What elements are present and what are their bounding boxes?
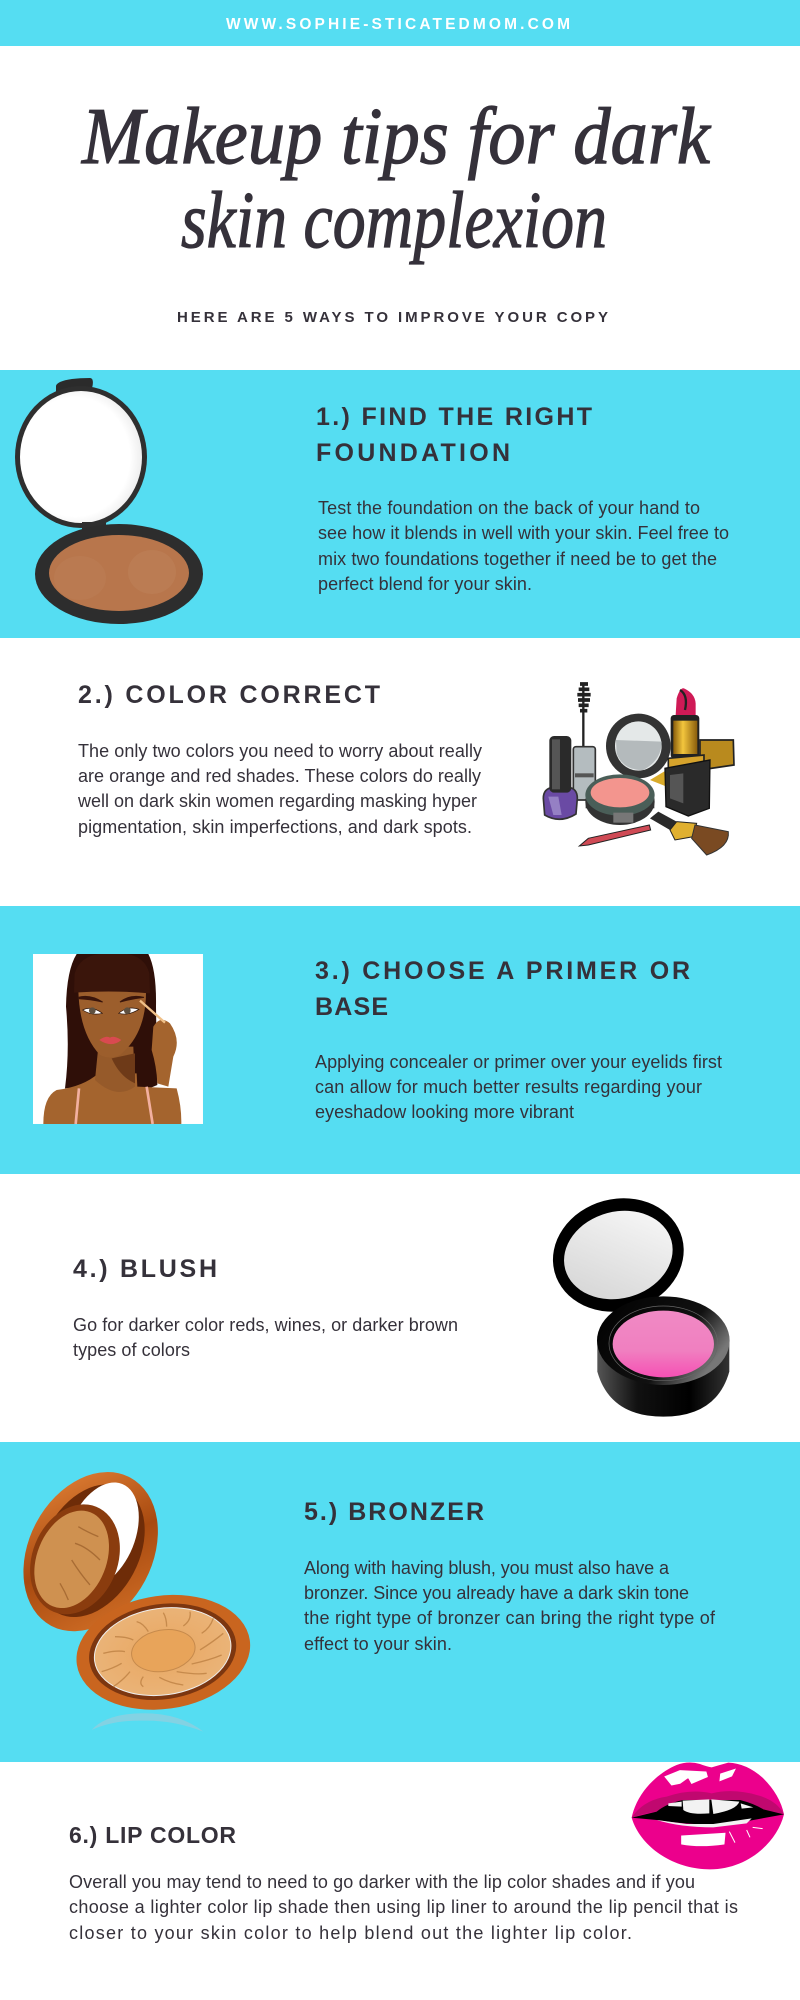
mouth bbox=[632, 1800, 784, 1824]
heading: 5.) BRONZER bbox=[304, 1498, 484, 1526]
body text: bronzer. Since you already have a dark skin tone bbox=[304, 1583, 689, 1603]
icon: foundation compact bbox=[15, 378, 203, 624]
heading: 2.) COLOR CORRECT bbox=[78, 681, 380, 709]
body text: the right type of bronzer can bring the right type of bbox=[304, 1608, 716, 1628]
website url: WWW.SOPHIE-STICATEDMOM.COM bbox=[226, 16, 570, 33]
icon: blush compact bbox=[540, 1184, 730, 1417]
heading bbox=[316, 403, 592, 467]
heading bbox=[315, 957, 690, 1021]
eyes bbox=[83, 1008, 139, 1014]
body text: see how it blends in well with your skin. Feel free to bbox=[318, 523, 729, 543]
body text: types of colors bbox=[73, 1340, 190, 1360]
body text: Along with having blush, you must also have a bbox=[304, 1558, 670, 1578]
highlights bbox=[665, 1769, 763, 1846]
subtitle: HERE ARE 5 WAYS TO IMPROVE YOUR COPY bbox=[177, 309, 608, 326]
body text bbox=[315, 1052, 722, 1122]
applicator bbox=[140, 1001, 165, 1023]
heading: 6.) LIP COLOR bbox=[69, 1822, 236, 1848]
nail polish bbox=[543, 736, 577, 819]
panel: tip 3 primer bbox=[0, 906, 800, 1174]
body text: Test the foundation on the back of your hand to bbox=[318, 498, 700, 518]
heading: 1.) FIND THE RIGHT bbox=[316, 403, 592, 431]
icon: makeup collection bbox=[543, 683, 734, 855]
body text bbox=[73, 1315, 458, 1360]
heading: FOUNDATION bbox=[316, 439, 510, 467]
title: Makeup tips for dark bbox=[81, 93, 711, 181]
straps bbox=[76, 1087, 153, 1124]
face bbox=[78, 990, 146, 1057]
icon: bronzer compact bbox=[0, 1449, 258, 1732]
body text: Applying concealer or primer over your eyelids first bbox=[315, 1052, 722, 1072]
title bbox=[81, 93, 711, 265]
pencil bbox=[579, 825, 651, 846]
lid bbox=[0, 1449, 185, 1655]
body text: pigmentation, skin imperfections, and dark spots. bbox=[78, 817, 472, 837]
shoulders bbox=[43, 1073, 181, 1124]
body text: can allow for much better results regarding your bbox=[315, 1077, 702, 1097]
teeth bbox=[668, 1799, 753, 1814]
heading: 3.) CHOOSE A PRIMER OR bbox=[315, 957, 690, 985]
panel: tip 5 bronzer bbox=[0, 1442, 800, 1762]
panel: tip 6 lip color bbox=[69, 1763, 784, 1943]
icon: pink lips bbox=[632, 1763, 784, 1869]
hair bbox=[65, 954, 157, 1100]
sun pattern in mirror bbox=[60, 1527, 100, 1600]
body text bbox=[304, 1558, 716, 1654]
heading: 4.) BLUSH bbox=[73, 1255, 217, 1283]
blush compact bbox=[585, 774, 655, 825]
body text: closer to your skin color to help blend out the lighter lip color. bbox=[69, 1923, 632, 1943]
top banner bbox=[0, 0, 800, 46]
body text: well on dark skin women regarding masking hyper bbox=[77, 791, 477, 811]
brush bbox=[650, 812, 728, 855]
reflection bbox=[92, 1713, 203, 1732]
neck bbox=[95, 1047, 135, 1092]
body text bbox=[69, 1872, 738, 1943]
lipstick bbox=[665, 688, 710, 816]
mirror bbox=[50, 1472, 153, 1598]
body text bbox=[318, 498, 729, 594]
body text: perfect blend for your skin. bbox=[318, 574, 532, 594]
panel: tip 4 blush bbox=[73, 1184, 730, 1417]
body text: The only two colors you need to worry about really bbox=[78, 741, 482, 761]
body text bbox=[77, 741, 482, 837]
bangs bbox=[74, 954, 150, 993]
gold box behind lipstick bbox=[700, 740, 734, 770]
heading: BASE bbox=[315, 993, 388, 1021]
body text: eyeshadow looking more vibrant bbox=[315, 1102, 574, 1122]
base bbox=[69, 1584, 258, 1721]
panel: tip 1 foundation bbox=[0, 370, 800, 638]
brows bbox=[78, 996, 144, 1002]
body text: are orange and red shades. These colors do really bbox=[78, 766, 481, 786]
sun pattern bbox=[102, 1612, 223, 1687]
body text: choose a lighter color lip shade then using lip liner to around the lip pencil that is bbox=[69, 1897, 738, 1917]
panel: tip 2 color correct bbox=[77, 681, 734, 855]
body text: effect to your skin. bbox=[304, 1634, 452, 1654]
body text: Go for darker color reds, wines, or darker brown bbox=[73, 1315, 458, 1335]
hand bbox=[152, 1020, 177, 1087]
body text: mix two foundations together if need be to get the bbox=[318, 549, 717, 569]
lips bbox=[99, 1037, 121, 1044]
title: skin complexion bbox=[181, 177, 607, 265]
mascara bbox=[573, 683, 595, 800]
illustration: woman applying eyeshadow bbox=[33, 954, 203, 1124]
body text: Overall you may tend to need to go darker with the lip color shades and if you bbox=[69, 1872, 695, 1892]
mirror bbox=[606, 714, 671, 778]
